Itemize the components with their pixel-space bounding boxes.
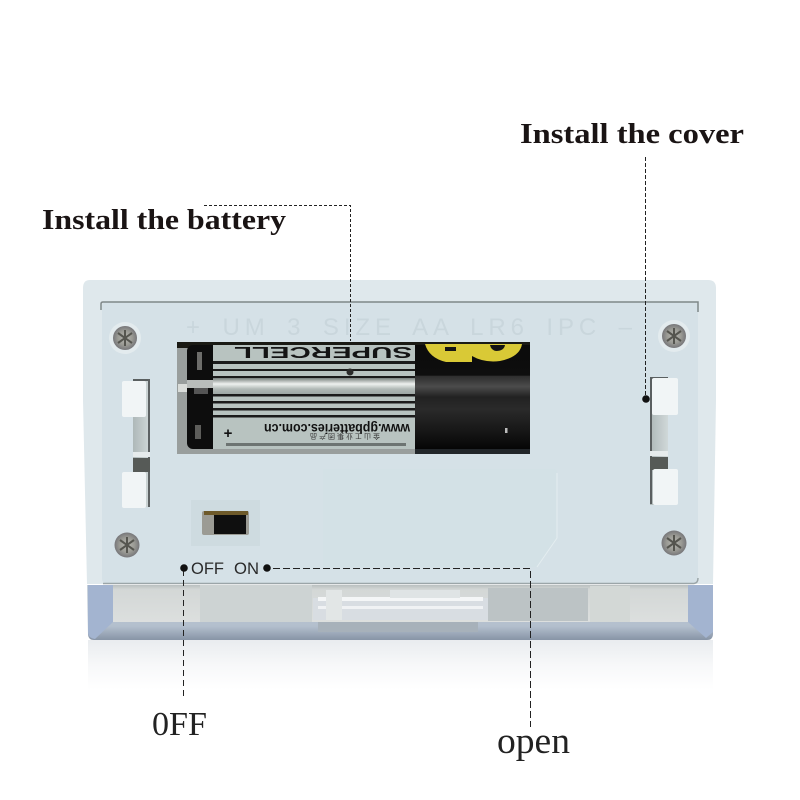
minus mark <box>505 428 508 433</box>
battery compartment <box>177 342 530 454</box>
slide switch <box>191 500 260 546</box>
label: open: open <box>497 721 570 762</box>
door panel recess <box>323 469 557 567</box>
leader: cover <box>644 157 646 395</box>
screw top right <box>658 320 690 352</box>
screw top left <box>109 322 141 354</box>
cover dot <box>642 395 650 403</box>
OFF label: OFF <box>191 559 224 578</box>
leader: open <box>273 568 530 727</box>
screw bottom right <box>662 530 686 556</box>
website text: www.gpbatteries.com.cn <box>264 421 411 437</box>
right clips <box>650 377 678 505</box>
manufacturer text: 金山工业集团产品 <box>310 432 380 441</box>
screw bottom left <box>114 532 140 558</box>
leader: battery <box>204 206 350 341</box>
screws <box>109 320 690 558</box>
plus sign: + <box>224 425 233 442</box>
fine print band <box>226 443 406 446</box>
GP logo <box>425 344 522 362</box>
reflection below device <box>88 640 713 690</box>
heading: install the battery: Install the battery <box>42 204 287 236</box>
battery dot <box>346 368 354 376</box>
leader: off <box>182 570 184 696</box>
heading: install the cover: Install the cover <box>520 118 744 150</box>
ON label: ON <box>234 559 259 578</box>
label: OFF: 0FF <box>152 706 207 743</box>
AA battery <box>187 343 530 449</box>
switch labels <box>191 559 259 578</box>
cover plate <box>101 302 698 584</box>
outer shell <box>83 280 716 584</box>
brand SUPERCELL: SUPERCELL <box>234 343 412 360</box>
embossed polarity text: + UM 3 SIZE AA LR6 IPC – <box>186 314 633 341</box>
striped label <box>213 345 415 449</box>
on dot <box>263 564 271 572</box>
cap highlight <box>187 352 213 439</box>
left clips <box>122 379 150 508</box>
device body <box>83 280 716 640</box>
off dot <box>180 564 188 572</box>
black battery end <box>415 345 530 449</box>
transparent base <box>87 585 713 640</box>
